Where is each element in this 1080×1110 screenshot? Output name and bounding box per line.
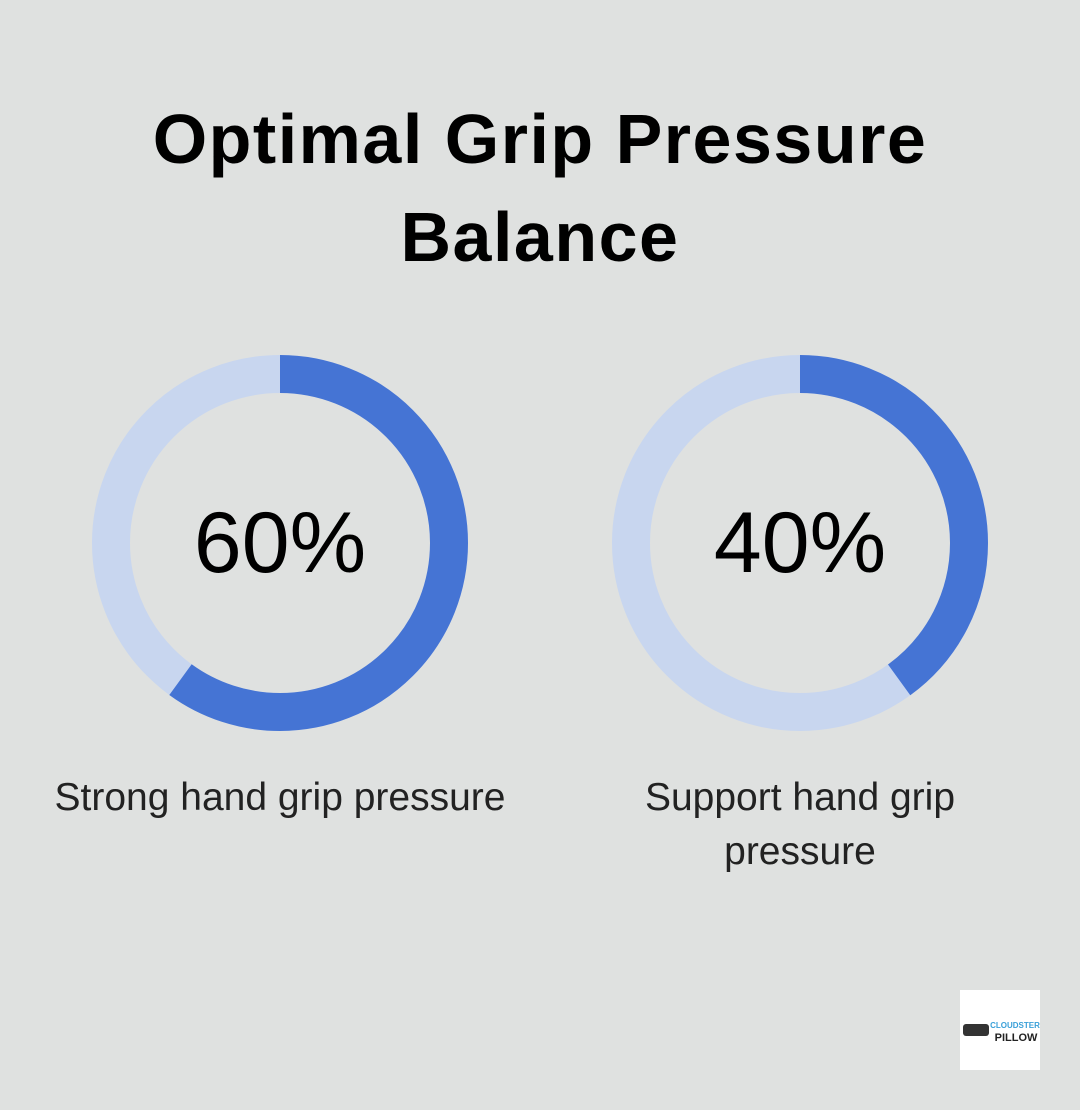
logo [960,990,1040,1070]
label: support hand: Support hand grip [645,776,955,819]
donut chart: support hand 40% [612,355,988,731]
donut chart: strong hand 60%: 60% [194,495,366,591]
title: Balance [400,198,679,276]
label: support hand [645,776,955,873]
label: strong hand: Strong hand grip pressure [55,776,505,819]
label: support hand: pressure [724,830,876,873]
donut chart: strong hand 60% [92,355,468,731]
logo: PILLOW [995,1032,1038,1044]
title [153,100,927,276]
title: Optimal Grip Pressure [153,100,927,178]
logo: CLOUDSTER [990,1021,1040,1030]
donut chart: support hand 40%: 40% [714,495,886,591]
